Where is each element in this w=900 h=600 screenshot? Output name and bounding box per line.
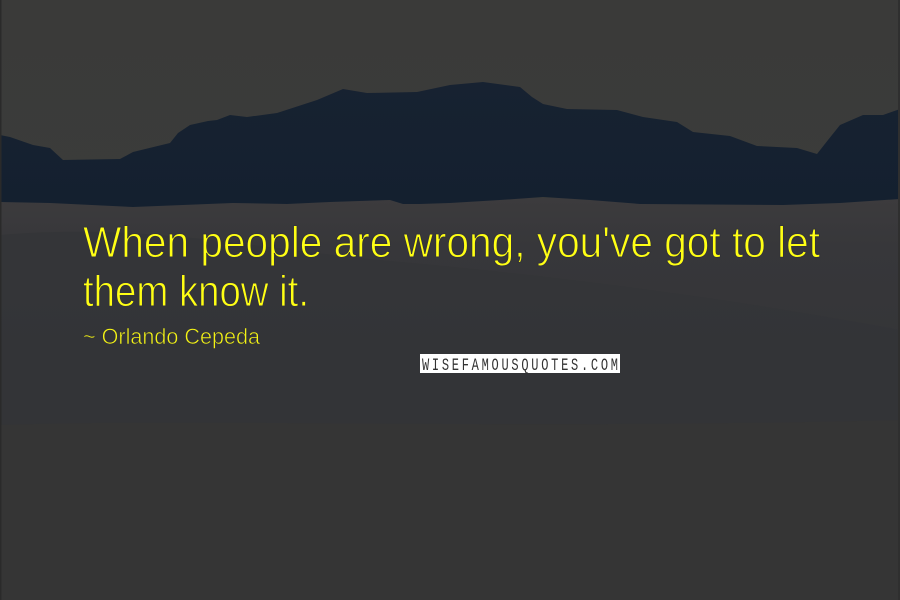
background: sand dunes [0,198,900,600]
mountain silhouette [0,82,900,207]
quote text: When people are wrong, you've got to let [83,218,820,267]
attribution: ~ Orlando Cepeda [83,324,261,349]
watermark badge: WISEFAMOUSQUOTES.COM [422,355,618,376]
quote text: them know it. [83,267,309,316]
quote text [83,218,820,316]
background: dusk sky [0,0,900,210]
